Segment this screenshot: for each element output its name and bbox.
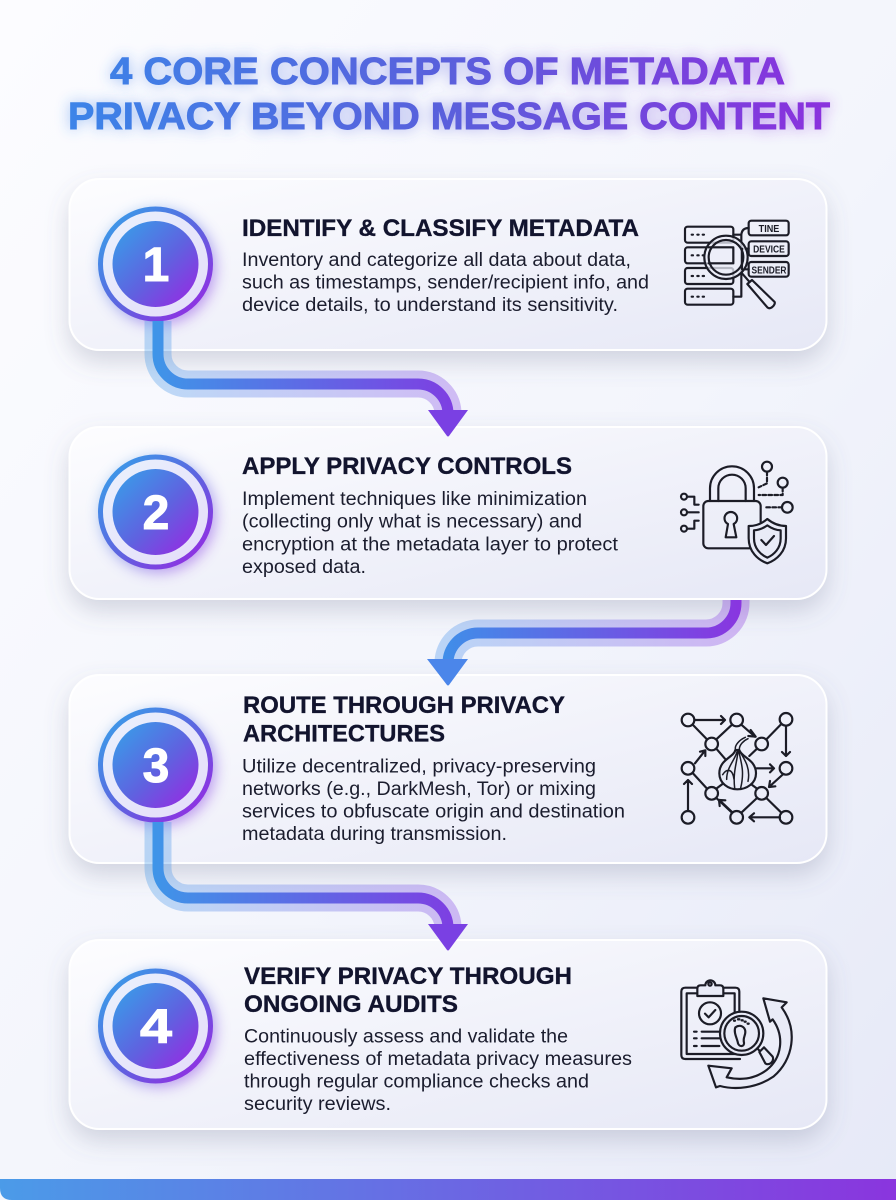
footer gradient bar [0,1179,896,1200]
step 3 heading: ARCHITECTURES [243,720,445,748]
card 4 background [70,940,826,1129]
step 4 number badge [100,971,216,1087]
icon: padlock with shield [681,462,793,563]
step 1 description: Inventory and categorize all data about data, [242,250,631,271]
step 2 description: (collecting only what is necessary) and [242,512,582,533]
step 3 description: Utilize decentralized, privacy-preserving [242,756,596,778]
step 3 description: metadata during transmission. [242,824,507,845]
icon: metadata inventory with magnifier: DEVICE [753,245,785,256]
step 2 number badge: 2 [143,487,169,540]
step 1 description [242,250,649,316]
step 1 number badge [100,209,216,325]
step 4 description: effectiveness of metadata privacy measures [244,1049,632,1070]
icon: metadata inventory with magnifier [685,221,789,308]
step 3 heading [243,692,565,748]
panel: step 4 verify privacy through audits [70,940,826,1129]
icon: metadata inventory with magnifier: SENDER [751,265,787,276]
step 4 description: security reviews. [244,1094,391,1115]
panel: step 1 identify and classify [70,179,826,350]
step 3 heading: ROUTE THROUGH PRIVACY [243,692,565,719]
step 2 description: exposed data. [242,557,366,578]
arrow: connector from step 2 to step 3 [427,600,736,686]
step 3 number badge: 3 [143,740,169,793]
icon: metadata inventory with magnifier: TINE [759,224,779,235]
icon: onion routing network [682,713,792,824]
card 1 background [70,179,826,350]
step 2 description [242,489,619,578]
step 4 heading: VERIFY PRIVACY THROUGH [244,963,572,990]
icon: audit clipboard with footprint and cycle arrows [681,980,792,1088]
step 4 heading: ONGOING AUDITS [244,991,458,1018]
step 3 description: networks (e.g., DarkMesh, Tor) or mixing [242,779,596,800]
step 3 number badge [100,710,216,826]
step 2 number badge [100,457,216,573]
step 2 description: encryption at the metadata layer to protect [242,534,619,555]
step 3 description [242,756,625,845]
step 4 description [244,1026,632,1115]
arrow: connector from step 1 to step 2 [158,321,468,436]
card 2 background [70,427,826,599]
title: PRIVACY BEYOND MESSAGE CONTENT [68,96,830,138]
step 1 description: such as timestamps, sender/recipient info, and [242,272,649,294]
step 1 heading: IDENTIFY & CLASSIFY METADATA [242,215,639,242]
step 4 number badge: 4 [140,1001,172,1054]
panel: step 3 route through privacy architectures [70,675,826,863]
step 2 heading: APPLY PRIVACY CONTROLS [242,453,572,480]
step 3 description: services to obfuscate origin and destination [242,802,625,823]
step 4 description: Continuously assess and validate the [244,1026,568,1048]
step 4 heading [244,963,572,1018]
card 3 background [70,675,826,863]
title: 4 CORE CONCEPTS OF METADATA [110,51,785,93]
arrow: connector from step 3 to step 4 [158,822,468,950]
step 1 number badge: 1 [143,239,169,292]
panel: step 2 apply privacy controls [70,427,826,599]
step 1 description: device details, to understand its sensitivity. [242,295,618,316]
title [68,51,830,138]
step 4 description: through regular compliance checks and [244,1072,589,1093]
step 2 description: Implement techniques like minimization [242,489,587,510]
